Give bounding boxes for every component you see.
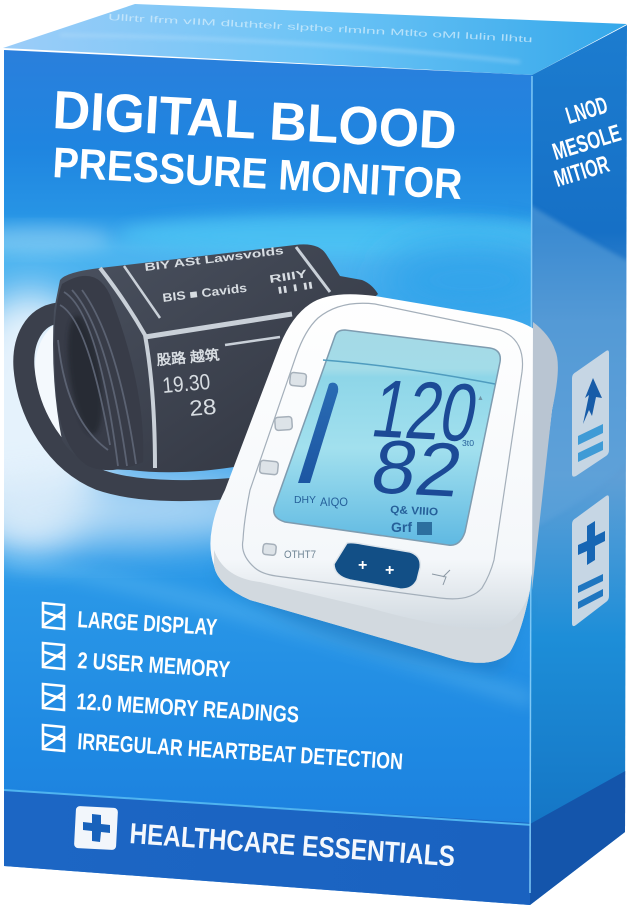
cuff coil shadow — [62, 313, 108, 437]
side panel icon: plus — [572, 495, 609, 626]
bezel outline — [242, 303, 523, 599]
side panel title: LNOD — [563, 92, 611, 130]
bottom right mark — [432, 570, 450, 585]
side panel title: MITIOR — [551, 151, 613, 193]
title: PRESSURE MONITOR — [51, 139, 463, 209]
healthcare essentials logo — [74, 806, 456, 873]
feature: memory readings — [43, 684, 300, 728]
cuff printed labels: 28 — [188, 394, 217, 421]
feature list — [43, 603, 404, 774]
feature: irregular heartbeat — [43, 725, 404, 774]
title — [51, 80, 463, 209]
feature: irregular heartbeat: IRREGULAR HEARTBEAT DETECTION — [77, 728, 404, 774]
bottom left label: OTHT7 — [284, 549, 316, 561]
top face mirrored small print: Ullrtr lfrm vIIM dluthtelr slpthe rlmlnn Mtlto oMl lulin llhtu — [108, 12, 533, 44]
air tube — [24, 313, 260, 491]
side band — [530, 770, 627, 910]
cuff printed labels: RIIIY — [269, 268, 309, 286]
LCD small labels — [294, 395, 484, 535]
feature: large display — [43, 603, 218, 640]
top face highlight — [60, 35, 520, 62]
feature: user memory — [43, 643, 231, 682]
title: DIGITAL BLOOD — [51, 80, 458, 161]
cuff body — [53, 244, 378, 472]
feature: user memory: 2 USER MEMORY — [77, 647, 231, 682]
LCD small labels: ▲ — [477, 395, 484, 402]
LCD small labels: Q& VIIIO — [390, 504, 439, 519]
side panel title — [549, 92, 624, 193]
front right edge highlight — [530, 76, 532, 893]
cuff rolled end — [54, 276, 143, 470]
cuff printed labels: 19.30 — [161, 369, 211, 398]
LCD small labels: 3t0 — [462, 439, 475, 448]
side swoosh — [530, 205, 630, 530]
LCD bar gauge — [298, 383, 338, 483]
device side tint on box edge — [532, 322, 558, 590]
LCD diastolic reading: 82 — [365, 425, 469, 513]
button plus marks: + — [358, 557, 367, 574]
centre button — [334, 543, 420, 589]
blood pressure cuff — [24, 244, 378, 491]
LCD small labels: AIQO — [320, 495, 348, 509]
box side face — [528, 20, 632, 910]
side buttons — [259, 372, 307, 556]
bottom band — [0, 790, 532, 910]
cuff printed labels: BIS ■ Cavids — [162, 281, 248, 305]
inner loop pale background — [35, 320, 75, 460]
icon: medical cross — [74, 806, 118, 850]
band top highlight — [4, 790, 532, 825]
button plus marks — [358, 557, 394, 579]
box top face — [3, 4, 627, 75]
LCD divider line — [323, 360, 495, 384]
cuff printed labels — [144, 245, 314, 421]
side panel icon: arrow — [572, 350, 609, 477]
LCD systolic reading: 120 — [366, 363, 485, 459]
feature: large display: LARGE DISPLAY — [77, 606, 218, 640]
monitor device — [210, 294, 558, 672]
LCD small labels: Grf — [391, 519, 412, 535]
cuff printed labels: BIY ASt Lawsvolds — [144, 245, 284, 274]
button plus marks: + — [385, 562, 394, 579]
cuff printed labels: II I II — [277, 280, 314, 297]
device shell — [210, 294, 557, 663]
device shadow — [212, 570, 525, 672]
LCD screen — [274, 330, 500, 545]
cuff printed labels: 股路 越筑 — [156, 347, 220, 368]
LCD small labels: DHY — [294, 495, 316, 506]
brand label: HEALTHCARE ESSENTIALS — [128, 818, 456, 873]
front background light swooshes — [0, 215, 560, 700]
feature: memory readings: 12.0 MEMORY READINGS — [76, 688, 300, 728]
device base lip — [214, 550, 530, 663]
cuff coil folds — [58, 290, 136, 466]
cuff white stripes — [100, 247, 330, 468]
